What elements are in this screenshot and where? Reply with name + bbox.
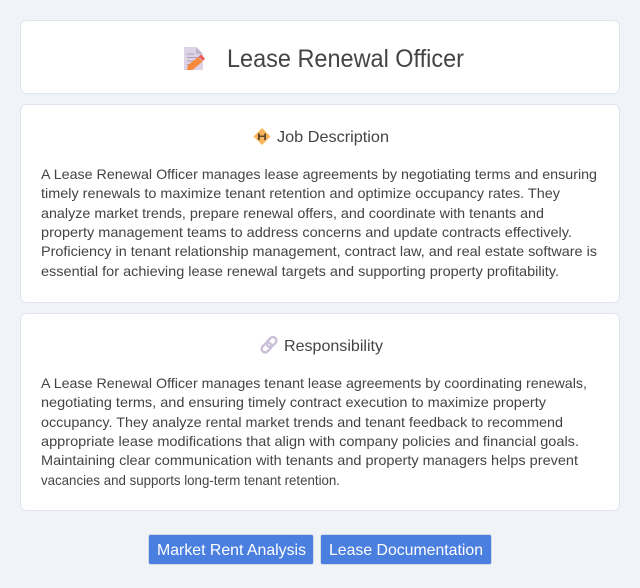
text block: job description: analyze market trends, prepare renewal offers, and coordinate with tenants and [41, 205, 544, 221]
icon: amber diamond [254, 128, 270, 145]
panel: job description [20, 104, 620, 302]
title: Lease Renewal Officer [227, 45, 464, 73]
text block: responsibility: appropriate lease modifications that align with company policies and financial goals. [41, 433, 579, 449]
heading: responsibility: Responsibility [284, 338, 383, 355]
text block: responsibility: occupancy. They analyze rental market trends and tenant feedback to recommend [41, 414, 563, 430]
tag: lease documentation: Lease Documentation [329, 542, 483, 559]
text block: responsibility: A Lease Renewal Officer manages tenant lease agreements by coordinating renewals, [41, 375, 587, 391]
tag: market rent analysis: Market Rent Analysis [157, 542, 306, 559]
icon: document with pencil [184, 47, 205, 70]
text block: job description: A Lease Renewal Officer manages lease agreements by negotiating terms and ensuring [41, 166, 597, 182]
text block: job description [41, 166, 597, 279]
text block: responsibility [41, 375, 587, 488]
text block: responsibility: Maintaining clear communication with tenants and property managers helps prevent [41, 452, 578, 468]
tag: lease documentation [320, 534, 492, 564]
text block: responsibility: vacancies and supports long-term tenant retention. [41, 472, 340, 488]
panel: responsibility [20, 314, 620, 510]
tag: market rent analysis [148, 534, 314, 564]
text block: job description: property management teams to address concerns and update contracts effectively. [41, 224, 572, 240]
heading: job description: Job Description [277, 129, 389, 146]
text block: job description: Proficiency in tenant relationship management, contract law, and real estate software is [41, 243, 597, 259]
text block: job description: essential for achieving lease renewal targets and supporting property profitability. [41, 263, 559, 279]
icon: chain link [260, 336, 278, 354]
text block: responsibility: negotiating terms, and ensuring timely contract execution to maximize property [41, 394, 546, 410]
panel: title header [20, 20, 620, 94]
text block: job description: timely renewals to maximize tenant retention and optimize occupancy rates. They [41, 185, 560, 201]
